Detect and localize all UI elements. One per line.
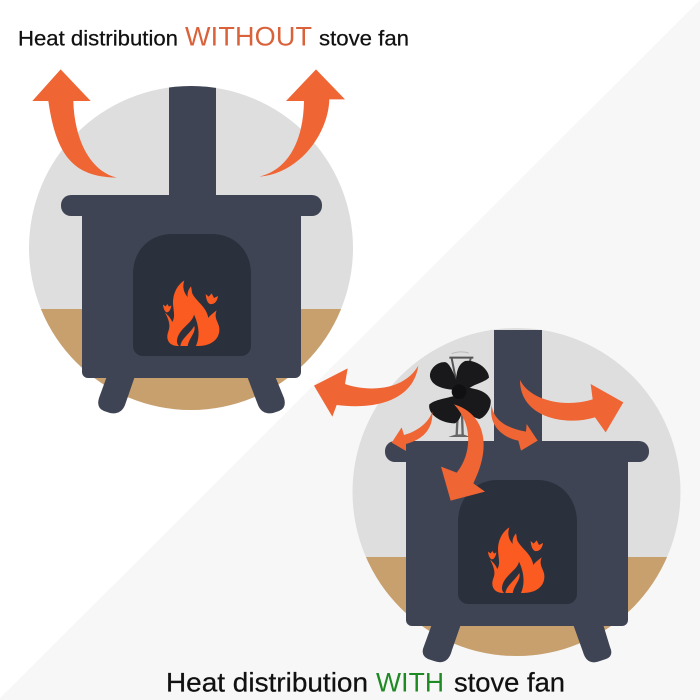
arrow: small down left <box>392 412 432 451</box>
panel: stove with fan <box>314 328 682 662</box>
arrow: heat to the right <box>520 380 623 432</box>
arrow: heat rising left <box>32 69 117 178</box>
heading: with stove fan: stove fan <box>454 668 565 698</box>
fire door <box>458 480 577 604</box>
stove body <box>61 195 322 413</box>
heading: with stove fan <box>166 668 565 698</box>
flame <box>488 527 544 594</box>
arrow: small down right <box>491 405 538 451</box>
icon: stove fan <box>429 352 491 437</box>
arrow: heat to the left <box>314 366 418 417</box>
stove body <box>385 330 649 662</box>
heading: with stove fan: Heat distribution <box>166 668 368 698</box>
room circle backdrop <box>29 80 353 411</box>
heading: without stove fan: Heat distribution <box>18 28 178 50</box>
room circle backdrop <box>352 328 682 659</box>
heading: without stove fan: stove fan <box>319 28 409 50</box>
arrow: heat rising right <box>259 69 345 177</box>
heading: without stove fan: WITHOUT <box>185 22 312 52</box>
panel: stove without fan <box>29 69 353 413</box>
arrow: big downward flow <box>441 404 485 501</box>
flame <box>163 280 219 347</box>
heading: with stove fan: WITH <box>376 668 444 698</box>
fire door <box>133 234 251 356</box>
heading: without stove fan <box>18 22 409 52</box>
